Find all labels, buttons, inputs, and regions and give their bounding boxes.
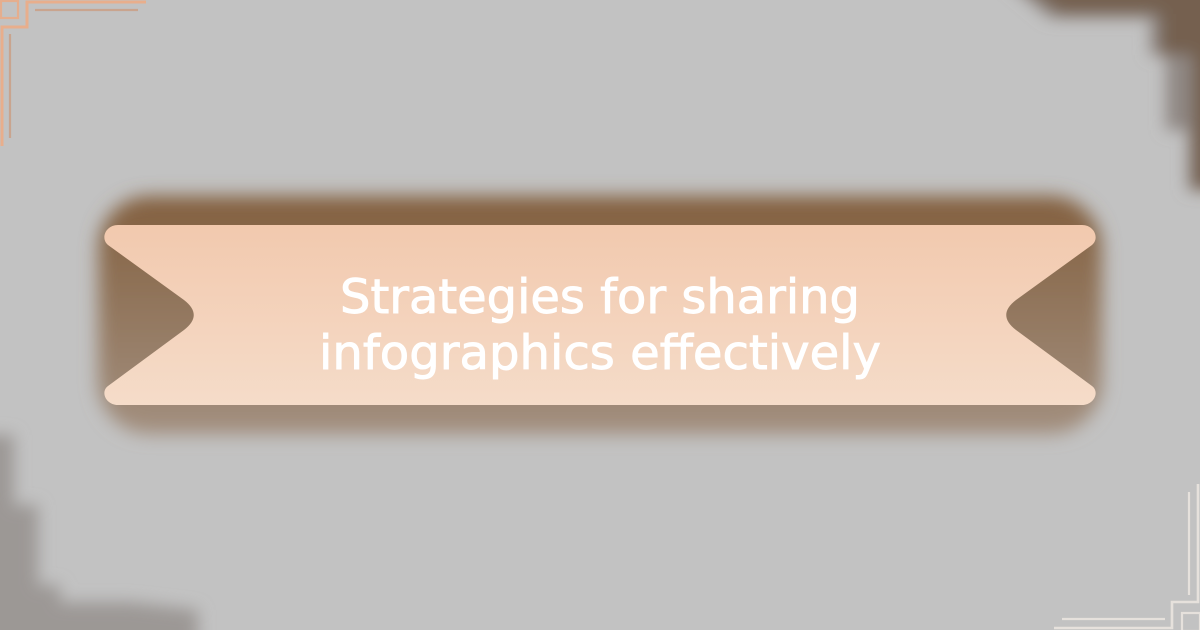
- title: [319, 270, 881, 381]
- title: Strategies for sharing: [340, 270, 860, 325]
- blurred corner shadow: bottom left: [0, 435, 198, 630]
- blurred corner shadow: top right: [1005, 0, 1200, 190]
- corner ornament: bottom right: [1054, 484, 1200, 630]
- ribbon shadow: [98, 196, 1102, 434]
- title: infographics effectively: [319, 326, 881, 381]
- ribbon banner: [104, 225, 1096, 405]
- corner ornament: top left: [1, 1, 146, 146]
